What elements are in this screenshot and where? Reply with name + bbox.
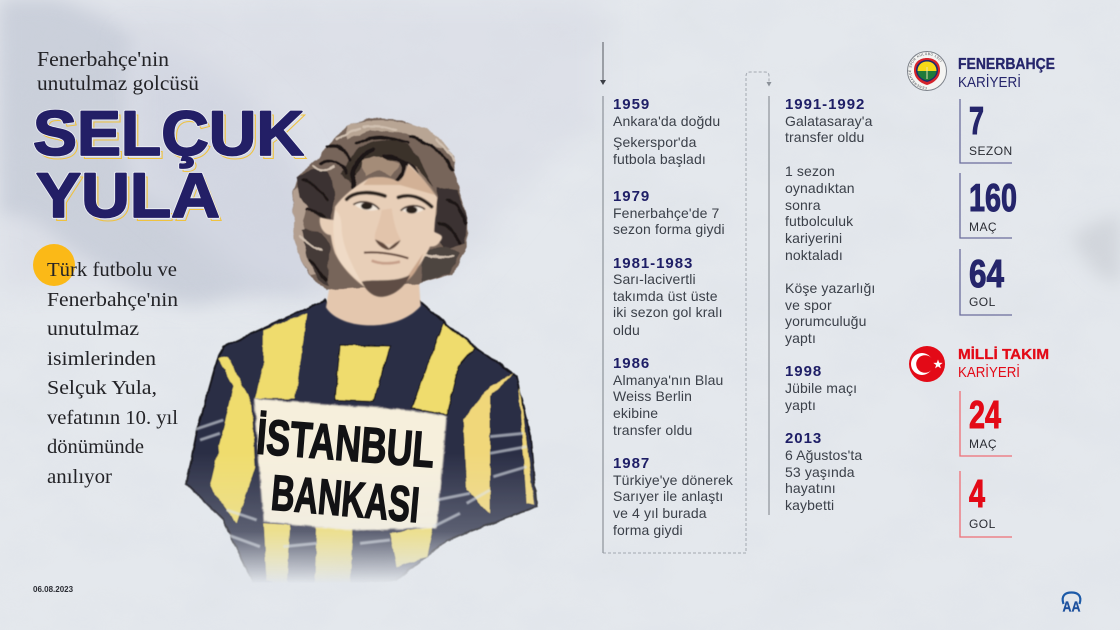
stat: 7 sezon — [960, 99, 1013, 163]
title: SELÇUK YULA: SELÇUK — [33, 99, 304, 169]
event: 1986: transfer oldu — [613, 422, 692, 438]
event: 1979: Fenerbahçe'de 7 — [613, 205, 720, 221]
event: 1991-1992: 1 sezon — [785, 163, 835, 179]
hair — [293, 118, 467, 290]
event: 1991-1992: oynadıktan — [785, 180, 855, 196]
event: 1981-1983: 1981-1983 — [613, 255, 693, 272]
event: 1981-1983: takımda üst üste — [613, 288, 718, 304]
timeline right column — [785, 96, 875, 513]
event: 1991-1992: Galatasaray'a — [785, 113, 873, 129]
intro paragraph: Selçuk Yula, — [47, 377, 157, 399]
event: 1991-1992: noktaladı — [785, 247, 843, 263]
event: 1991-1992: kariyerini — [785, 230, 842, 246]
heading: national team career — [958, 346, 1049, 381]
event: 1987: forma giydi — [613, 522, 683, 538]
icon: AA logo — [1062, 592, 1081, 616]
timeline right line — [768, 96, 770, 515]
icon: Fenerbahçe crest: FENERBAHÇE SPOR KULÜBÜ 1907 — [908, 52, 942, 90]
event: 1986: Weiss Berlin — [613, 388, 692, 404]
event: 1991-1992: transfer oldu — [785, 129, 864, 145]
event: 1991-1992: ve spor — [785, 297, 832, 313]
heading: national team career: KARİYERİ — [958, 363, 1020, 381]
stat: 7 sezon: SEZON — [969, 144, 1013, 158]
event: 2013: 53 yaşında — [785, 464, 855, 480]
stat: 160 maç — [960, 173, 1017, 238]
event: 1998: yaptı — [785, 397, 816, 413]
intro paragraph: dönümünde — [47, 436, 144, 458]
title: SELÇUK YULA: YULA — [36, 161, 220, 231]
heading: Fenerbahçe career — [958, 56, 1055, 91]
intro paragraph — [47, 259, 178, 488]
stat: 7 sezon: 7 — [969, 100, 984, 143]
event: 1979: 1979 — [613, 188, 650, 205]
stat: 64 gol — [960, 249, 1012, 315]
head, coordinates follow a 1:1 crop of the head — [293, 118, 467, 297]
stat: 160 maç: 160 — [969, 177, 1017, 220]
title: SELÇUK YULA: SELÇUK — [36, 102, 307, 172]
heading: subtitle: Fenerbahçe'nin — [37, 47, 170, 71]
stat: 4 gol: 4 — [969, 473, 985, 516]
event: 1987: ve 4 yıl burada — [613, 505, 707, 521]
yellow accent circle — [33, 244, 75, 286]
event: 1959: Ankara'da doğdu — [613, 113, 720, 129]
event: 1986: ekibine — [613, 405, 658, 421]
event: 1998: 1998 — [785, 363, 822, 380]
event: 1991-1992: futbolculuk — [785, 213, 854, 229]
event: 2013: 6 Ağustos'ta — [785, 447, 862, 463]
event: 1986 — [613, 355, 723, 438]
event: 1991-1992: sonra — [785, 197, 821, 213]
intro paragraph: Fenerbahçe'nin — [47, 289, 178, 311]
event: 1959 — [613, 96, 720, 167]
timeline left column — [613, 96, 734, 538]
date: 06.08.2023 — [33, 585, 74, 594]
arrow: timeline start — [600, 42, 606, 85]
intro paragraph: vefatının 10. yıl — [47, 407, 178, 429]
portrait: Selçuk Yula in striped jersey — [187, 118, 537, 590]
event: 1987: Sarıyer ile anlaştı — [613, 488, 723, 504]
event: 1981-1983: oldu — [613, 322, 640, 338]
event: 1979 — [613, 188, 725, 237]
heading: subtitle — [37, 47, 199, 95]
event: 1991-1992: 1991-1992 — [785, 96, 865, 113]
sponsor text — [254, 408, 437, 533]
event: 2013: kaybetti — [785, 497, 834, 513]
stat: 64 gol: 64 — [969, 253, 1004, 296]
event: 1981-1983: iki sezon gol kralı — [613, 304, 723, 320]
face — [320, 163, 442, 297]
event: 2013: hayatını — [785, 480, 836, 496]
title: SELÇUK YULA — [33, 99, 307, 234]
jersey — [187, 300, 537, 590]
event: 2013 — [785, 430, 862, 513]
heading: Fenerbahçe career: KARİYERİ — [958, 73, 1021, 91]
event: 2013: 2013 — [785, 430, 822, 447]
timeline left line — [602, 96, 604, 553]
event: 1986: Almanya'nın Blau — [613, 372, 723, 388]
event: 1986: 1986 — [613, 355, 650, 372]
event: 1998 — [785, 363, 857, 413]
heading: subtitle: unutulmaz golcüsü — [37, 71, 199, 95]
event: 1981-1983 — [613, 255, 723, 338]
event: 1959: 1959 — [613, 96, 650, 113]
sponsor text: İSTANBUL — [254, 408, 437, 478]
neck — [326, 273, 421, 325]
stat: 160 maç: MAÇ — [969, 220, 997, 234]
event: 1981-1983: Sarı-lacivertli — [613, 271, 696, 287]
event: 1991-1992: yorumculuğu — [785, 313, 866, 329]
event: 1991-1992 — [785, 96, 875, 346]
intro paragraph: anılıyor — [47, 466, 112, 488]
title: SELÇUK YULA: YULA — [36, 161, 220, 231]
event: 1987: Türkiye'ye dönerek — [613, 472, 734, 488]
heading: national team career: MİLLİ TAKIM — [958, 346, 1049, 363]
heading: Fenerbahçe career: FENERBAHÇE — [958, 56, 1055, 73]
stat: 24 maç: MAÇ — [969, 437, 997, 451]
stat: 64 gol: GOL — [969, 295, 996, 309]
title: SELÇUK YULA: YULA — [39, 164, 223, 234]
event: 1979: sezon forma giydi — [613, 221, 725, 237]
title: SELÇUK YULA: SELÇUK — [33, 99, 304, 169]
event: 1959: Şekerspor'da — [613, 134, 697, 150]
icon: AA logo: AA — [1062, 598, 1081, 616]
intro paragraph: Türk futbolu ve — [47, 259, 177, 281]
icon: Turkish flag — [909, 346, 945, 382]
dissolving brush strokes — [193, 420, 527, 547]
event: 1991-1992: yaptı — [785, 330, 816, 346]
stat: 4 gol: GOL — [969, 517, 996, 531]
stat: 24 maç: 24 — [969, 394, 1001, 437]
event: 1987 — [613, 455, 734, 538]
event: 1998: Jübile maçı — [785, 380, 857, 396]
arrow: dashed connector between timeline columns — [603, 72, 772, 553]
intro paragraph: isimlerinden — [47, 348, 156, 370]
stat: 24 maç — [960, 391, 1012, 456]
event: 1959: futbola başladı — [613, 151, 706, 167]
stat: 4 gol — [960, 471, 1012, 537]
event: 1991-1992: Köşe yazarlığı — [785, 280, 875, 296]
event: 1987: 1987 — [613, 455, 650, 472]
intro paragraph: unutulmaz — [47, 318, 139, 340]
sponsor text: BANKASI — [269, 465, 422, 533]
